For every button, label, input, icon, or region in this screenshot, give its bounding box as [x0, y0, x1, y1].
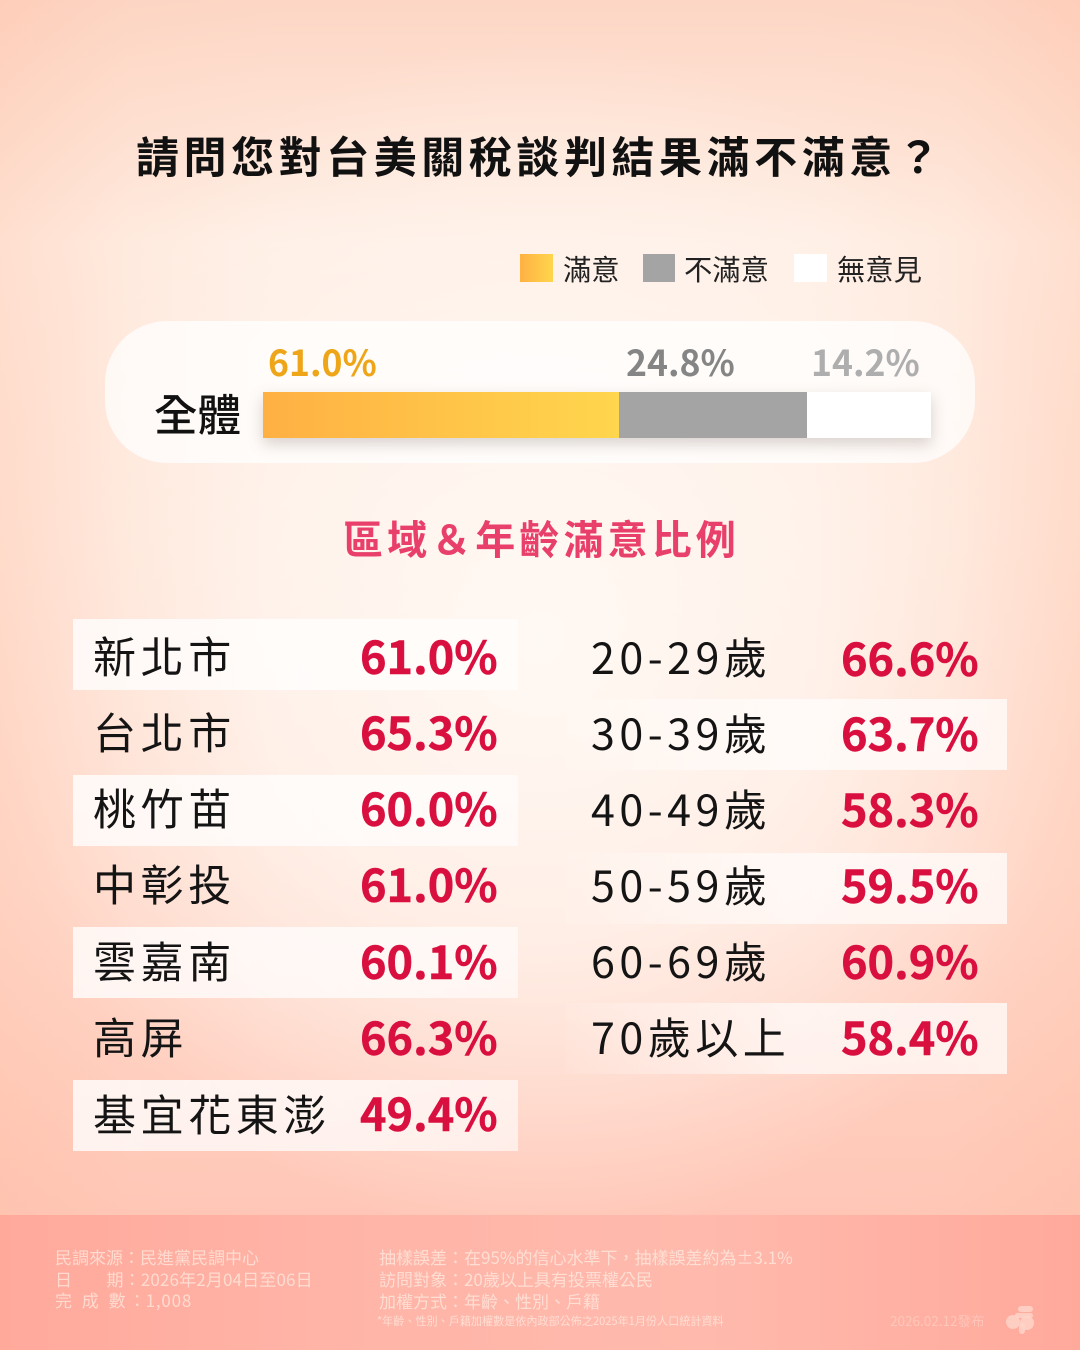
legend: [520, 248, 922, 289]
bar segment: dissatisfied 24.8%: [619, 392, 807, 438]
region value: 台北市: 65.3%: [360, 698, 498, 763]
panel: age satisfaction table: [591, 624, 1007, 1074]
region value: 雲嘉南: 60.1%: [360, 927, 498, 992]
age value: 20-29歲: 66.6%: [841, 624, 979, 689]
row stripe: 50-59歲: [565, 853, 1007, 924]
panel: region satisfaction table: [73, 619, 518, 1151]
region value: 高屏: 66.3%: [360, 1003, 498, 1068]
age value: 30-39歲: 63.7%: [841, 699, 979, 764]
footer band: [0, 1215, 1080, 1350]
overall satisfied value: 61.0%: [268, 336, 377, 387]
row stripe: 新北市: [73, 619, 518, 690]
panel: overall result: [105, 321, 975, 463]
age value: 50-59歲: 59.5%: [841, 851, 979, 916]
region label: 台北市: 台北市: [93, 700, 236, 762]
age label: 60-69歲: 60-69歲: [591, 929, 771, 991]
footer: methodology: [379, 1244, 793, 1313]
region value: 新北市: 61.0%: [360, 622, 498, 687]
region label: 高屏: 高屏: [93, 1005, 188, 1067]
legend label: satisfied: 滿意: [563, 248, 620, 289]
bar segment: no opinion 14.2%: [807, 392, 931, 438]
overall label: 全體: [154, 381, 241, 444]
legend label: dissatisfied: 不滿意: [684, 248, 769, 289]
age value: 60-69歲: 60.9%: [841, 927, 979, 992]
footer: weighting footnote: *年齡、性別、戶籍加權數是依內政部公佈之2025年1月份人口統計資料: [377, 1313, 724, 1329]
bar segment: satisfied 61.0%: [263, 392, 619, 438]
row stripe: 70歲以上: [565, 1003, 1007, 1074]
legend label: no opinion: 無意見: [837, 248, 922, 289]
region label: 雲嘉南: 雲嘉南: [93, 929, 236, 991]
overall dissatisfied value: 24.8%: [626, 336, 735, 387]
age value: 40-49歲: 58.3%: [841, 775, 979, 840]
footer: poll source: 民調來源：民進黨民調中心: [55, 1244, 259, 1269]
stacked bar: [263, 392, 931, 438]
region label: 基宜花東澎: 基宜花東澎: [93, 1082, 331, 1144]
region value: 桃竹苗: 60.0%: [360, 774, 498, 839]
region value: 基宜花東澎: 49.4%: [360, 1079, 498, 1144]
section heading: 區域＆年齡滿意比例: [343, 508, 740, 566]
footer: methodology: 抽樣誤差：在95%的信心水準下，抽樣誤差約為±3.1%: [379, 1244, 793, 1269]
row stripe: 基宜花東澎: [73, 1080, 518, 1151]
overall no opinion value: 14.2%: [811, 336, 920, 387]
region label: 中彰投: 中彰投: [93, 852, 236, 914]
age label: 50-59歲: 50-59歲: [591, 853, 771, 915]
legend swatch: no opinion: [794, 254, 827, 282]
footer: poll source: [55, 1244, 313, 1312]
footer: poll source: 日 期：2026年2月04日至06日: [55, 1266, 313, 1291]
row stripe: 桃竹苗: [73, 775, 518, 846]
age label: 20-29歲: 20-29歲: [591, 625, 771, 687]
title: 請問您對台美關稅談判結果滿不滿意？: [136, 124, 944, 186]
age label: 40-49歲: 40-49歲: [591, 777, 771, 839]
age label: 70歲以上: 70歲以上: [591, 1005, 790, 1067]
age label: 30-39歲: 30-39歲: [591, 701, 771, 763]
row stripe: 30-39歲: [565, 699, 1007, 770]
row stripe: 雲嘉南: [73, 927, 518, 998]
footer: publish date: 2026.02.12發布: [890, 1310, 984, 1330]
region value: 中彰投: 61.0%: [360, 850, 498, 915]
footer: methodology: 訪問對象：20歲以上具有投票權公民: [379, 1266, 653, 1291]
legend swatch: satisfied: [520, 254, 553, 282]
region label: 桃竹苗: 桃竹苗: [93, 776, 236, 838]
footer: poll source: 完 成 數：1,008: [55, 1287, 192, 1312]
age value: 70歲以上: 58.4%: [841, 1003, 979, 1068]
region label: 新北市: 新北市: [93, 624, 236, 686]
footer: methodology: 加權方式：年齡、性別、戶籍: [379, 1288, 600, 1313]
icon: party logo: [1006, 1306, 1034, 1334]
legend swatch: dissatisfied: [643, 254, 675, 282]
